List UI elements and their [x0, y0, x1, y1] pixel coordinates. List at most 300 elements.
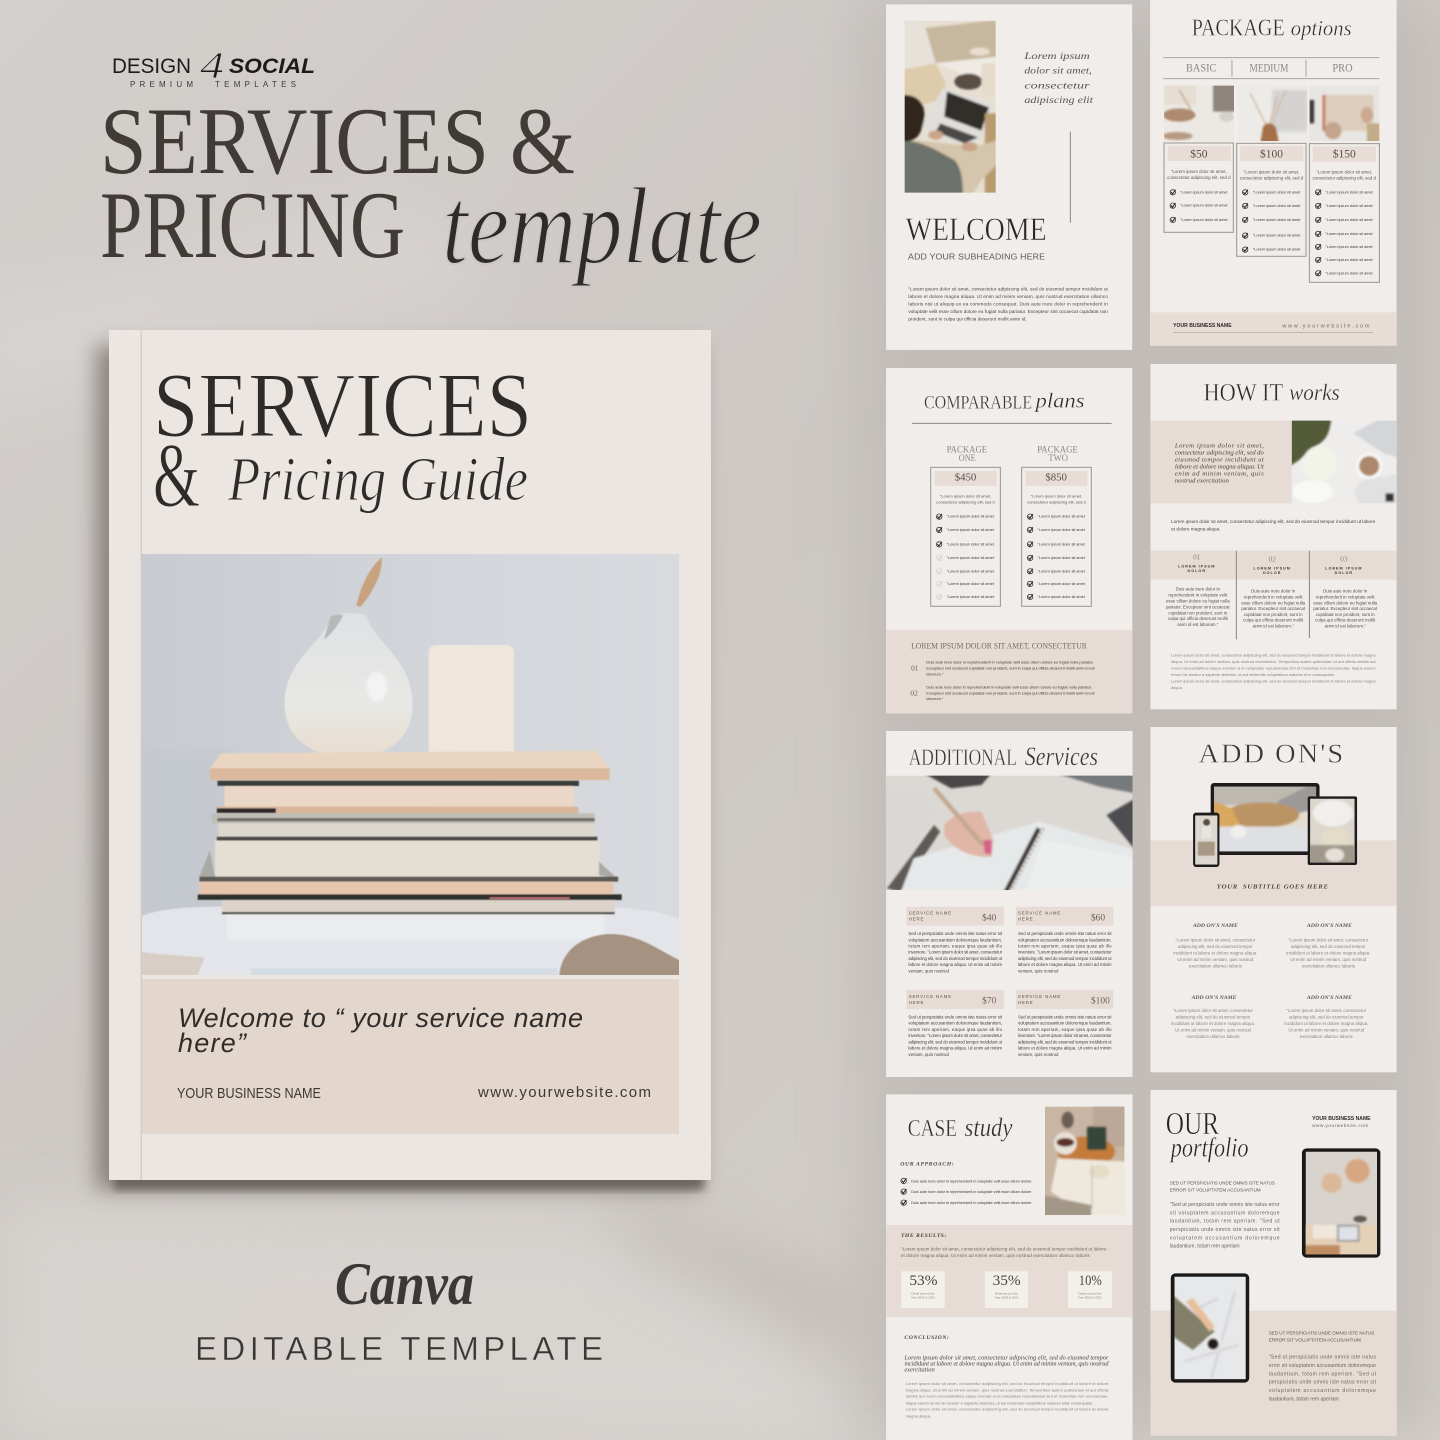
business contact: www.yourwebsite.com — [1312, 1123, 1368, 1128]
add-on item 4 — [1284, 995, 1368, 1039]
numbered notes band: Duis aute irure dolor in reprehenderit in voluptate velit esse cillum dolore eu fugiat nulla pariatur. — [926, 659, 1094, 664]
photo: notebook — [1309, 86, 1380, 141]
package two column: TWO — [1048, 454, 1068, 464]
package one column: $450 — [955, 472, 976, 484]
service card 2: labore et dolore magna aliqua. Ut enim ad minim — [1018, 962, 1112, 967]
main title: SERVICES & — [100, 88, 575, 194]
cover heading: & — [153, 424, 200, 526]
heading: works — [1289, 380, 1340, 406]
body copy: proident, sunt in culpa qui officia deserunt mollit anim id. — [908, 316, 1027, 321]
business contact: YOUR BUSINESS NAME — [1312, 1116, 1371, 1122]
plan tabs: MEDIUM — [1250, 63, 1288, 75]
service card 4: adipiscing elit, sed do eiusmod tempor incididunt ut — [1018, 1039, 1112, 1044]
subtitle: YOUR SUBTITLE GOES HERE — [1217, 883, 1329, 890]
heading — [909, 742, 1098, 771]
portfolio copy 2: "Sed ut perspiciatis unde omnis iste natus — [1269, 1355, 1376, 1361]
service card 1: labore et dolore magna aliqua. Ut enim ad minim — [908, 962, 1002, 967]
add-on item 4: ADD ON'S NAME — [1306, 995, 1352, 1001]
package two column: "Lorem ipsum dolor sit amet — [1038, 527, 1086, 532]
stat 53%: Year 2020 & 2021 — [911, 1296, 935, 1300]
service card 3: SERVICE NAME — [909, 994, 952, 999]
heading: COMPARABLE — [924, 392, 1032, 413]
add-on item 4: "Lorem ipsum dolor sit amet, consectetur — [1286, 1008, 1367, 1013]
step 3: 03 — [1340, 554, 1348, 563]
price card: basic: consectetur adipiscing elit, sed d — [1167, 175, 1231, 180]
tagline: dolor sit amet, — [1024, 66, 1092, 77]
business contact — [1312, 1116, 1371, 1128]
price card: basic — [1164, 143, 1233, 232]
service card 2: adipiscing elit, sed do eiusmod tempor incididunt ut — [1018, 956, 1112, 961]
body copy: labore et dolore magna aliqua. Ut enim ad minim veniam, quis nostrud exercitation ullamco — [908, 294, 1108, 299]
three steps — [1150, 551, 1397, 639]
numbered notes band: laborum." — [926, 671, 944, 676]
service card 3: Sed ut perspiciatis unde omnis iste natus error sit — [908, 1014, 1003, 1019]
tablet mockup: room scene — [1302, 1148, 1380, 1258]
service card 3 — [906, 990, 1004, 1057]
page: case study — [886, 1094, 1133, 1440]
service card 1: inventore. "Lorem ipsum dolor sit amet, consectetur — [908, 950, 1003, 955]
service card 1: SERVICE NAME — [909, 911, 952, 916]
price card: medium: $100 — [1260, 148, 1283, 161]
cover heading: Pricing Guide — [227, 446, 528, 514]
portfolio copy 1: sit voluptatem accusantium doloremque — [1170, 1210, 1280, 1216]
intro copy: et dolore magna aliqua. — [1171, 526, 1220, 531]
phone — [1193, 813, 1219, 867]
conclusion: Lorem ipsum dolor sit amet, consectetur adipiscing elit, sed do eiusmod tempor — [903, 1355, 1109, 1362]
closing copy — [1171, 653, 1377, 690]
cover footer band — [142, 979, 679, 1134]
tablet mockup: bed scene — [1171, 1273, 1249, 1383]
step 1: reprehenderit in voluptate velit — [1168, 593, 1228, 598]
package one column: "Lorem ipsum dolor sit amet — [947, 555, 995, 560]
portfolio copy 2: ERROR SIT VOLUPTATEM ACCUSANTIUM — [1269, 1337, 1361, 1342]
service card 4: labore et dolore magna aliqua. Ut enim ad minim — [1018, 1045, 1112, 1050]
tagline: adipiscing elit — [1024, 95, 1093, 106]
approach list: Duis aute irure dolor in reprehenderit in voluptate velit esse cillum dolore — [911, 1200, 1032, 1205]
step 1: DOLOR — [1188, 569, 1206, 573]
step 3: esse cillum dolore eu fugiat nulla — [1313, 600, 1378, 605]
step 2: Duis aute irure dolor in — [1251, 588, 1296, 593]
package two column: "Lorem ipsum dolor sit amet — [1038, 594, 1086, 599]
cover photo: vase, candle and books — [142, 554, 679, 975]
package two column: "Lorem ipsum dolor sit amet — [1038, 581, 1086, 586]
price card: medium: "Lorem ipsum dolor sit amet — [1253, 189, 1301, 194]
page: package options — [1150, 0, 1397, 346]
editable template label: EDITABLE TEMPLATE — [195, 1330, 603, 1367]
price card: pro: "Lorem ipsum dolor sit amet — [1325, 189, 1373, 194]
package two column: $850 — [1045, 472, 1067, 484]
price card: pro: "Lorem ipsum dolor sit amet — [1325, 217, 1373, 222]
add-on item 2 — [1286, 923, 1370, 968]
tagline: consectetur — [1024, 80, 1090, 91]
step 1: culpa qui officia deserunt mollit — [1168, 616, 1229, 621]
intro band: Lorem ipsum dolor sit amet, — [1174, 443, 1264, 450]
price card: medium: "Lorem ipsum dolor sit amet — [1253, 217, 1301, 222]
main title: template — [442, 165, 762, 287]
page: add ons — [1150, 727, 1397, 1072]
closing copy: rerum necessitatibus saepe eveniet ut et voluptates repudiandae sint et molestiae non recusandae. Itaque earum — [1171, 666, 1376, 671]
price card: basic: "Lorem ipsum dolor sit amet — [1180, 217, 1228, 222]
step 3: DOLOR — [1335, 571, 1353, 575]
cover footer band: Welcome to “ your service name — [178, 1003, 583, 1033]
page: our portfolio — [1150, 1090, 1397, 1436]
step 3: pariatur. Excepteur sint occaecat — [1313, 606, 1378, 611]
stat 35%: Detail around the — [995, 1291, 1018, 1295]
page: additional services — [883, 731, 1135, 1077]
stat 53%: 53% — [909, 1273, 937, 1289]
cover heading — [153, 354, 532, 526]
portfolio copy 2: laudantium, totam rem aperiam. "Sed ut — [1269, 1371, 1377, 1377]
conclusion: Lorem ipsum dolor sit amet, consectetur adipiscing elit, sed do eiusmod tempor incididunt ut labore et dolore — [906, 1381, 1109, 1386]
service card 4: inventore. "Lorem ipsum dolor sit amet, consectetur — [1018, 1033, 1112, 1038]
service card 1: voluptatem accusantium doloremque laudantium, — [908, 937, 1002, 942]
heading — [908, 1112, 1013, 1142]
conclusion: magna aliqua. Ut enim ad minim veniam, quis nostrud exercitation. Temporibus autem quibusdam et aut officiis — [906, 1387, 1109, 1392]
cover heading: SERVICES — [153, 354, 532, 456]
brand logo: TEMPLATES — [215, 80, 296, 89]
price card: medium — [1237, 143, 1306, 256]
portfolio copy 1: laudantium, totam rem aperiam — [1170, 1244, 1240, 1250]
body copy: voluptate velit esse cillum dolore eu fugiat nulla pariatur. Excepteur sint occaecat cupidatat non — [908, 309, 1108, 314]
intro band: enim ad minim veniam, quis — [1175, 470, 1264, 477]
step 1: pariatur. Excepteur sint occaecat — [1166, 604, 1230, 609]
price card: pro: "Lorem ipsum dolor sit amet — [1325, 231, 1373, 236]
heading: Services — [1025, 742, 1098, 771]
main title — [100, 88, 762, 287]
numbered notes band: Duis aute irure dolor in reprehenderit in voluptate velit esse cillum dolore eu fugiat nulla pariatur. — [926, 685, 1092, 690]
service card 4: SERVICE NAME — [1018, 994, 1061, 999]
price card: basic: $50 — [1190, 147, 1208, 160]
portfolio copy 1: "Sed ut perspiciatis unde omnis iste natus error — [1170, 1202, 1280, 1208]
service card 2: veniam, quis nostrud — [1018, 969, 1059, 974]
package one column: "Lorem ipsum dolor sit amet — [947, 581, 995, 586]
step 3: LOREM IPSUM — [1325, 567, 1363, 571]
step 3: cupidatat non proident, sunt in — [1316, 612, 1375, 617]
step 2: culpa qui officia deserunt mollit — [1243, 618, 1304, 623]
package one column: PACKAGE — [947, 445, 987, 455]
service card 4: HERE — [1018, 1000, 1034, 1005]
add-on item 3: ADD ON'S NAME — [1191, 995, 1237, 1001]
package two column: "Lorem ipsum dolor sit amet — [1038, 568, 1086, 573]
heading: plans — [1033, 388, 1085, 412]
intro copy: Lorem ipsum dolor sit amet, consectetur adipiscing elit, sed do eiusmod tempor incididunt ut labore — [1171, 519, 1376, 524]
price card: medium: consectetur adipiscing elit, sed d — [1240, 175, 1304, 180]
approach list: Duis aute irure dolor in reprehenderit in voluptate velit esse cillum dolore — [911, 1189, 1032, 1194]
closing copy: rerum hic tenetur a sapiente delectus, ut aut reiciendis voluptatibus maiores et in consequatur. — [1171, 672, 1335, 677]
portfolio copy 2: error sit voluptatem accusantium doloremque — [1269, 1363, 1376, 1369]
step 2 — [1241, 554, 1306, 629]
approach list — [900, 1162, 1032, 1205]
photo: planner and hand — [886, 776, 1133, 890]
step 1 — [1166, 552, 1230, 627]
price card: pro: consectetur adipiscing elit, sed d — [1312, 175, 1377, 180]
add-on item 3: "Lorem ipsum dolor sit amet, consectetur — [1173, 1008, 1253, 1013]
portfolio copy 2 — [1269, 1331, 1377, 1402]
heading: portfolio — [1169, 1133, 1249, 1164]
step 3: reprehenderit in voluptate velit — [1316, 594, 1375, 599]
add-on item 1: "Lorem ipsum dolor sit amet, consectetur — [1176, 938, 1256, 943]
add-on item 2: ADD ON'S NAME — [1306, 923, 1352, 929]
service card 3: labore et dolore magna aliqua. Ut enim ad minim — [908, 1045, 1002, 1050]
add-on item 4: adipiscing elit, sed do eiusmod tempor — [1289, 1014, 1364, 1019]
service card 3: adipiscing elit, sed do eiusmod tempor incididunt ut — [908, 1039, 1003, 1044]
heading: ADDITIONAL — [909, 745, 1017, 771]
step 3: anim id est laborum." — [1325, 624, 1366, 629]
cover footer band: www.yourwebsite.com — [477, 1084, 651, 1101]
results: "Lorem ipsum dolor sit amet, consectetur adipiscing elit, sed do eiusmod tempor incididunt ut labore — [901, 1247, 1107, 1252]
service card 1: $40 — [982, 912, 997, 923]
step 3: culpa qui officia deserunt mollit — [1315, 618, 1376, 623]
body copy: laboris nisi ut aliquip ex ea commodo consequat. Duis aute irure dolor in reprehenderit in — [908, 301, 1108, 306]
main title: PRICING — [100, 172, 405, 278]
portfolio copy 1 — [1170, 1181, 1280, 1250]
fourth row of template pages — [886, 1090, 1397, 1440]
step 1: 01 — [1193, 552, 1201, 561]
step 3: Duis aute irure dolor in — [1323, 588, 1368, 593]
intro band: labore et dolore magna aliqua. Ut — [1175, 463, 1264, 470]
closing copy: aliqua. — [1171, 685, 1183, 690]
service card 1 — [906, 907, 1004, 974]
package two column — [1022, 445, 1091, 606]
service card 2 — [1016, 907, 1113, 974]
tagline: Lorem ipsum — [1023, 51, 1090, 62]
stat 10% — [1068, 1271, 1112, 1308]
add-on item 1: ADD ON'S NAME — [1192, 923, 1238, 929]
add-on item 4: incididunt ut labore et dolore magna aliqua. — [1284, 1021, 1368, 1026]
cover footer band: YOUR BUSINESS NAME — [177, 1085, 321, 1102]
approach list: OUR APPROACH: — [900, 1162, 954, 1168]
price card: pro: "Lorem ipsum dolor sit amet — [1325, 203, 1373, 208]
service card 2: totam rem aperiam, eaque ipsa quae ab illo — [1018, 944, 1112, 949]
photo: coffee and candle — [1045, 1106, 1124, 1215]
numbered notes band — [910, 642, 1096, 701]
heading: welcome: WELCOME — [906, 212, 1047, 248]
heading: CASE — [908, 1115, 957, 1142]
service card 3: $70 — [982, 996, 997, 1007]
step 1: esse cillum dolore eu fugiat nulla — [1166, 599, 1230, 604]
price card: medium: "Lorem ipsum dolor sit amet, — [1244, 169, 1299, 174]
step 2: anim id est laborum." — [1253, 624, 1294, 629]
service card 4: voluptatem accusantium doloremque laudantium, — [1018, 1021, 1112, 1026]
brand logo: DESIGN — [112, 55, 191, 78]
plan tabs: PRO — [1332, 63, 1353, 75]
add-on item 1: adipiscing elit, sed do eiusmod tempor — [1178, 944, 1253, 949]
service card 3: inventore. "Lorem ipsum dolor sit amet, consectetur — [908, 1033, 1003, 1038]
stat 10%: Year 2020 & 2021 — [1078, 1296, 1102, 1300]
add-on item 2: Ut enim ad minim veniam, quis nostrud — [1290, 957, 1367, 962]
heading: OUR — [1166, 1105, 1220, 1141]
portfolio copy 1: laudantium, totam rem aperiam. "Sed ut — [1170, 1219, 1280, 1225]
package one column: "Lorem ipsum dolor sit amet — [947, 568, 995, 573]
numbered notes band: Excepteur sint occaecat cupidatat non proident, sunt in culpa qui officia deserunt mollit anim id est — [926, 665, 1096, 670]
conclusion: magna aliqua. — [906, 1414, 931, 1419]
add-on item 3 — [1171, 995, 1255, 1039]
portfolio copy 1: ERROR SIT VOLUPTATEM ACCUSANTIUM — [1170, 1187, 1261, 1192]
service card 4: Sed ut perspiciatis unde omnis iste natus error sit — [1018, 1014, 1112, 1019]
package two column: PACKAGE — [1037, 445, 1078, 455]
stat 10%: Detail around the — [1078, 1291, 1102, 1295]
conclusion: incididunt ut labore et dolore magna aliqua. Ut enim ad minim veniam, quis nostrud — [904, 1361, 1109, 1368]
add-on item 1: incididunt ut labore et dolore magna aliqua. — [1173, 951, 1257, 956]
numbered notes band: LOREM IPSUM DOLOR SIT AMET, CONSECTETUR — [911, 642, 1088, 651]
service card 4: totam rem aperiam, eaque ipsa quae ab illo — [1018, 1027, 1112, 1032]
brand logo: SOCIAL — [229, 55, 315, 78]
step 2: cupidatat non proident, sunt in — [1244, 612, 1303, 617]
package one column — [931, 445, 1000, 606]
price card: basic: "Lorem ipsum dolor sit amet, — [1171, 169, 1227, 174]
step 1: LOREM IPSUM — [1178, 565, 1215, 569]
package one column: ONE — [959, 454, 976, 464]
service card 1: totam rem aperiam, eaque ipsa quae ab illo — [908, 944, 1003, 949]
price card: pro: "Lorem ipsum dolor sit amet — [1325, 244, 1373, 249]
results: et dolore magna aliqua. Ut enim ad minim veniam, quis nostrud exercitation ullamco laboris — [901, 1253, 1090, 1258]
numbered notes band: 02 — [910, 688, 918, 697]
package two column: "Lorem ipsum dolor sit amet, — [1031, 494, 1082, 499]
closing copy: Lorem ipsum dolor sit amet, consectetur adipiscing elit, sed do eiusmod tempor incididunt ut labore et dolore magna — [1171, 653, 1376, 658]
add-on item 3: exercitation ullamco laboris — [1187, 1034, 1240, 1039]
package one column: "Lorem ipsum dolor sit amet, — [940, 494, 991, 499]
service card 4 — [1016, 990, 1113, 1057]
plan tabs: BASIC — [1186, 63, 1216, 75]
step 2: LOREM IPSUM — [1254, 567, 1291, 571]
top row of template pages — [886, 0, 1397, 350]
price card: medium: "Lorem ipsum dolor sit amet — [1253, 233, 1301, 238]
package one column: consectetur adipiscing elit, sed d — [936, 499, 995, 504]
step 1: anim id est laborum." — [1177, 622, 1219, 627]
service card 2: voluptatem accusantium doloremque laudantium, — [1018, 937, 1112, 942]
conclusion: Lorem ipsum dolor sit amet, consectetur adipiscing elit, sed do eiusmod tempor incididunt ut labore et dolore — [906, 1407, 1109, 1412]
price card: pro: "Lorem ipsum dolor sit amet — [1325, 257, 1373, 262]
page: how it works — [1150, 364, 1401, 709]
stat 35% — [985, 1271, 1028, 1308]
canva label: Canva — [335, 1251, 474, 1317]
laptop — [1211, 783, 1320, 855]
heading: PACKAGE — [1192, 15, 1285, 42]
service card 3: HERE — [909, 1000, 924, 1005]
approach list: Duis aute irure dolor in reprehenderit in voluptate velit esse cillum dolore — [911, 1178, 1032, 1183]
service card 2: SERVICE NAME — [1018, 911, 1061, 916]
add-on item 3: Ut enim ad minim veniam, quis nostrud — [1175, 1027, 1252, 1032]
stat 10%: 10% — [1079, 1273, 1102, 1289]
stat 53%: Detail around the — [911, 1291, 935, 1295]
portfolio copy 2: voluptatem accusantium doloremque — [1269, 1388, 1376, 1394]
package one column: "Lorem ipsum dolor sit amet — [947, 541, 995, 546]
step 2: DOLOR — [1263, 571, 1281, 575]
price card: basic: "Lorem ipsum dolor sit amet — [1180, 189, 1228, 194]
step 2: esse cillum dolore eu fugiat nulla — [1241, 600, 1306, 605]
step 2: pariatur. Excepteur sint occaecat — [1241, 606, 1306, 611]
price card: basic: "Lorem ipsum dolor sit amet — [1180, 203, 1228, 208]
tablet — [1308, 796, 1357, 865]
step 2: reprehenderit in voluptate velit — [1244, 594, 1303, 599]
price card: pro: "Lorem ipsum dolor sit amet — [1325, 270, 1373, 275]
service card 4: $100 — [1091, 996, 1110, 1007]
portfolio copy 1: perspiciatis unde omnis iste natus error sit — [1170, 1227, 1280, 1233]
stat 35%: 35% — [993, 1273, 1021, 1289]
page footer: YOUR BUSINESS NAME — [1173, 323, 1232, 329]
service card 2: inventore. "Lorem ipsum dolor sit amet, consectetur — [1018, 950, 1112, 955]
package two column: consectetur adipiscing elit, sed d — [1027, 499, 1086, 504]
closing copy: aliqua. Ut enim ad minim veniam, quis nostrud exercitation. Temporibus autem quibusdam et aut officiis debitis aut — [1171, 659, 1377, 664]
step 1: cupidatat non proident, sunt in — [1168, 610, 1228, 615]
service card 2: $60 — [1091, 912, 1105, 923]
conclusion — [903, 1335, 1109, 1419]
add-on item 1: Ut enim ad minim veniam, quis nostrud — [1177, 957, 1254, 962]
second row of template pages — [886, 364, 1401, 713]
step 3 — [1313, 554, 1378, 629]
photo: reed diffuser — [1248, 88, 1308, 141]
add-on item 2: adipiscing elit, sed do eiusmod tempor — [1291, 944, 1366, 949]
package one column: "Lorem ipsum dolor sit amet — [947, 527, 995, 532]
stat 53% — [901, 1271, 945, 1308]
brand logo: PREMIUM — [130, 80, 193, 89]
add-on item 4: exercitation ullamco laboris — [1300, 1034, 1354, 1039]
heading — [1204, 378, 1340, 407]
device mockups — [1193, 783, 1357, 867]
portfolio copy 2: SED UT PERSPICIATIS UNDE OMNIS ISTE NATUS — [1269, 1331, 1374, 1336]
add-on item 3: adipiscing elit, sed do eiusmod tempor — [1176, 1014, 1251, 1019]
body copy: "Lorem ipsum dolor sit amet, consectetur adipiscing elit, sed do eiusmod tempor incididunt ut — [908, 286, 1109, 291]
price card: medium: "Lorem ipsum dolor sit amet — [1253, 247, 1301, 252]
service card 2: HERE — [1018, 917, 1034, 922]
results — [901, 1233, 1112, 1308]
intro band: consectetur adipiscing elit, sed do — [1175, 450, 1264, 457]
conclusion: CONCLUSION: — [904, 1335, 949, 1341]
conclusion: debitis aut rerum necessitatibus saepe eveniet ut et voluptates repudiandae sint et molestiae non recusandae. — [906, 1394, 1109, 1399]
add-on item 2: exercitation ullamco laboris — [1302, 963, 1356, 968]
add-on item 4: Ut enim ad minim veniam, quis nostrud — [1288, 1027, 1365, 1032]
portfolio copy 2: perspiciatis unde omnis iste natus error sit — [1269, 1380, 1377, 1386]
service card 2: Sed ut perspiciatis unde omnis iste natus error sit — [1018, 931, 1112, 936]
subheading: ADD YOUR SUBHEADING HERE — [908, 252, 1045, 262]
conclusion: exercitation — [904, 1367, 935, 1374]
stat 35%: Year 2020 & 2021 — [994, 1296, 1019, 1300]
third row of template pages — [883, 727, 1397, 1077]
service card 4: veniam, quis nostrud — [1018, 1052, 1059, 1057]
panel: book cover mockup — [96, 330, 711, 1190]
numbered notes band: laborum." — [926, 696, 944, 701]
cover footer band: here” — [178, 1028, 247, 1058]
photo: flowers and coffee — [1292, 420, 1396, 504]
heading — [924, 388, 1085, 413]
add-on item 1 — [1173, 923, 1257, 968]
plan tabs — [1163, 58, 1379, 79]
service card 1: veniam, quis nostrud — [908, 969, 949, 974]
brand logo: 4 — [200, 45, 224, 87]
heading: HOW IT — [1204, 378, 1283, 407]
price card: pro: "Lorem ipsum dolor sit amet, — [1316, 169, 1372, 174]
portfolio copy 1: voluptatem accusantium doloremque — [1170, 1235, 1280, 1241]
package two column: "Lorem ipsum dolor sit amet — [1038, 541, 1086, 546]
heading — [1166, 1105, 1249, 1164]
heading: ADD ON'S — [1198, 739, 1343, 770]
add-on item 1: exercitation ullamco laboris — [1189, 963, 1243, 968]
add-on item 2: "Lorem ipsum dolor sit amet, consectetur — [1288, 938, 1369, 943]
brand logo — [112, 45, 315, 89]
tagline — [1023, 51, 1093, 106]
heading: study — [965, 1112, 1013, 1142]
package one column: "Lorem ipsum dolor sit amet — [947, 514, 995, 519]
photo: hand writing — [1164, 86, 1234, 141]
service card 3: totam rem aperiam, eaque ipsa quae ab illo — [908, 1027, 1003, 1032]
service card 1: HERE — [909, 917, 924, 922]
intro copy — [1171, 519, 1376, 531]
service card 1: adipiscing elit, sed do eiusmod tempor incididunt ut — [908, 956, 1003, 961]
package two column: "Lorem ipsum dolor sit amet — [1038, 514, 1086, 519]
price card: pro — [1309, 144, 1379, 282]
page: comparable plans — [886, 368, 1132, 713]
numbered notes band: 01 — [911, 664, 919, 673]
